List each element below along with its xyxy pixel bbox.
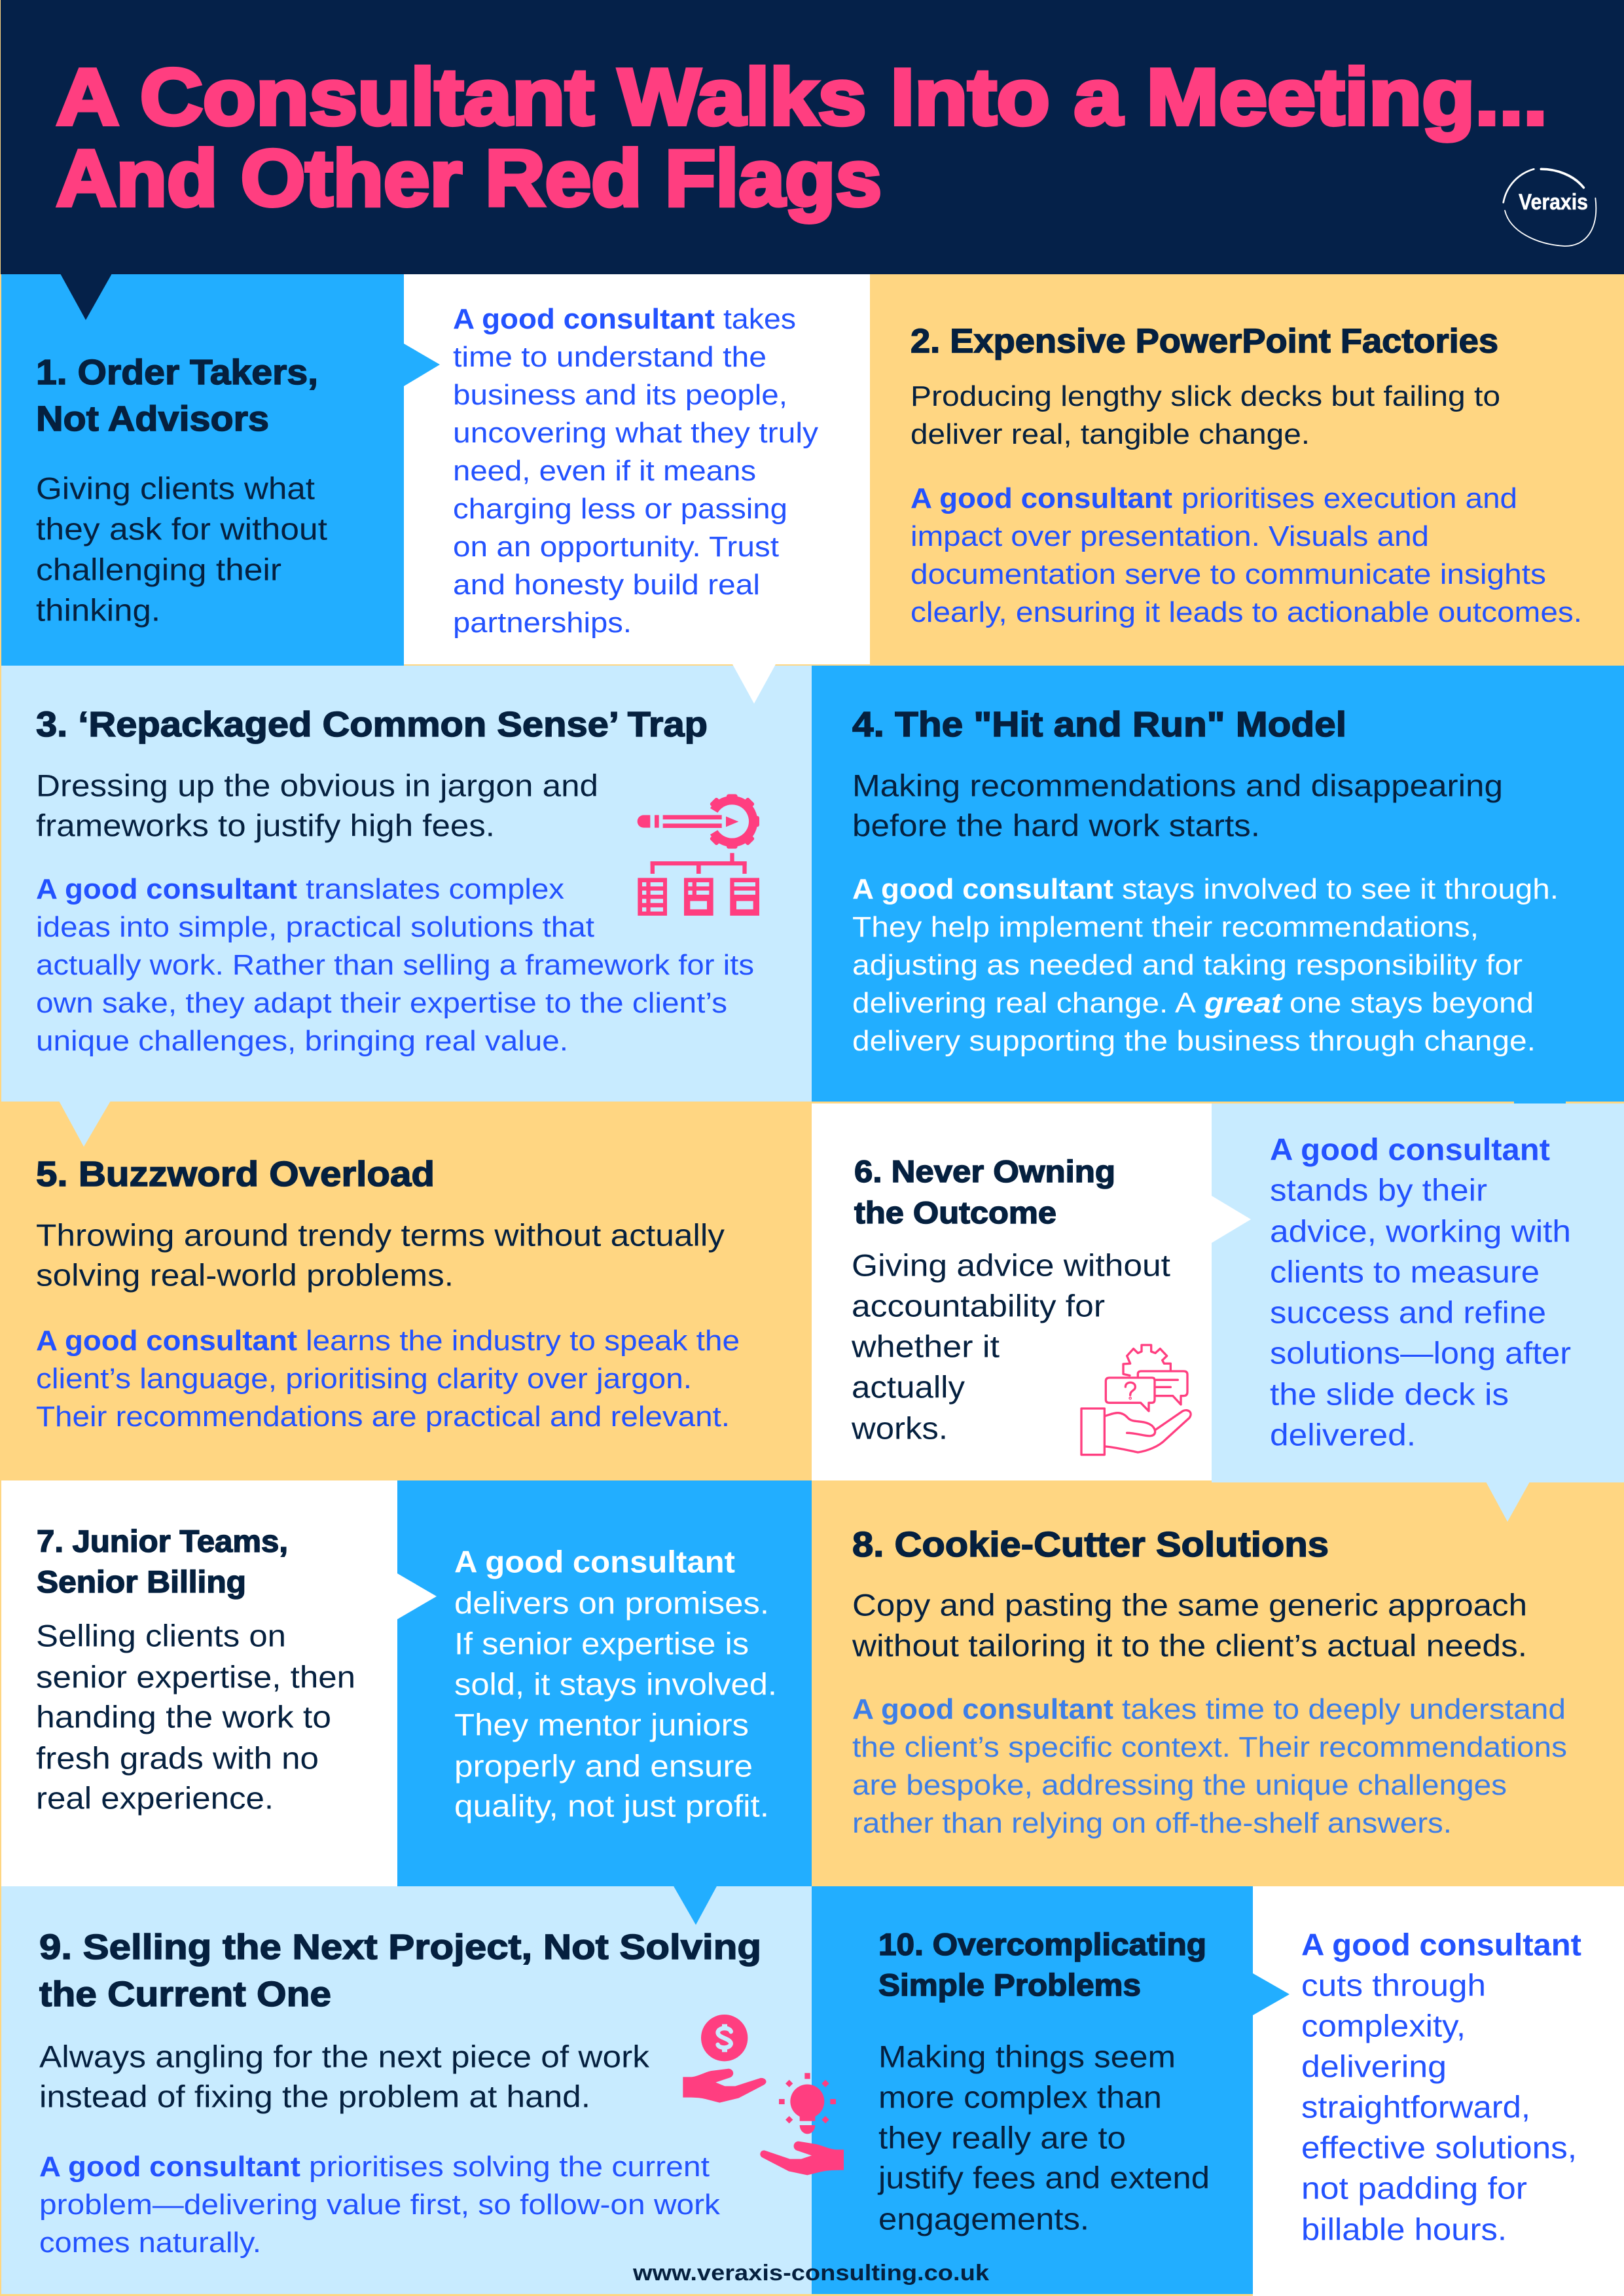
panel: 6 good consultant: success and refine (1270, 1295, 1546, 1330)
panel: 2 expensive powerpoint factories: A good consultant (911, 482, 1172, 514)
panel: 6 good consultant: the slide deck is (1270, 1377, 1509, 1411)
panel: 9 selling the next project: 9. Selling the Next Project, Not Solving (39, 1928, 761, 1967)
panel: 2 expensive powerpoint factories: documentation serve to communicate insights (911, 558, 1546, 590)
title: And Other Red Flags (56, 134, 882, 223)
panel: 7 good consultant: delivers on promises. (454, 1585, 769, 1621)
panel: 8 cookie-cutter solutions: takes time to deeply understand (1122, 1693, 1566, 1725)
logo: Veraxis (1504, 169, 1596, 246)
panel: 10 overcomplicating simple problems: they really are to (878, 2121, 1126, 2155)
panel: 7 junior teams senior billing: Selling clients on (36, 1618, 286, 1653)
panel: 1 good consultant: takes (723, 303, 796, 335)
panel: 3 repackaged common sense trap: translates complex (306, 873, 564, 905)
panel: 6 good consultant: A good consultant (1270, 1132, 1550, 1166)
panel: 3 repackaged common sense trap: own sake, they adapt their expertise to the client’s (36, 987, 727, 1019)
panel: 4 hit and run model: They help implement their recommendations, (852, 911, 1479, 943)
panel: 1 good consultant: and honesty build real (453, 569, 760, 601)
panel: 4 hit and run model: one stays beyond (1290, 987, 1534, 1019)
panel: 4 hit and run model: before the hard work starts. (852, 808, 1260, 843)
panel: 10 overcomplicating simple problems: Making things seem (878, 2039, 1176, 2073)
title: A Consultant Walks Into a Meeting... (56, 52, 1547, 141)
panel: 3 repackaged common sense trap: frameworks to justify high fees. (36, 808, 495, 843)
panel: 4 hit and run model: A good consultant (852, 873, 1113, 905)
logo: Veraxis: Veraxis (1519, 190, 1588, 215)
panel: 6 never owning the outcome: the Outcome (854, 1195, 1056, 1230)
panel: 7 junior teams senior billing: senior expertise, then (36, 1660, 355, 1694)
panel: 4 hit and run model: delivering real change. A (852, 987, 1197, 1019)
panel: 5 buzzword overload: learns the industry to speak the (306, 1325, 740, 1357)
icon: pencil, gear and framework documents (638, 794, 759, 916)
panel: 6 never owning the outcome: 6. Never Owning (854, 1154, 1115, 1189)
panel: 5 buzzword overload: client’s language, prioritising clarity over jargon. (36, 1363, 692, 1395)
title (56, 52, 1547, 223)
panel: 5 buzzword overload: solving real-world problems. (36, 1258, 454, 1292)
panel: 1 order takers not advisors: 1. Order Takers, (36, 353, 318, 392)
panel: 7 good consultant: A good consultant (454, 1545, 735, 1579)
panel: 6 good consultant (1212, 1103, 1624, 1522)
panel: 6 good consultant: advice, working with (1270, 1213, 1571, 1249)
panel: 9 selling the next project: instead of fixing the problem at hand. (39, 2079, 590, 2114)
panel: 4 hit and run model: 4. The "Hit and Run" Model (852, 705, 1346, 744)
panel: 1 good consultant: time to understand the (453, 341, 767, 373)
panel: 3 repackaged common sense trap: Dressing up the obvious in jargon and (36, 768, 598, 802)
panel: 1 good consultant: uncovering what they truly (453, 417, 818, 449)
panel: 10 good consultant: straightforward, (1301, 2089, 1530, 2125)
panel: 2 expensive powerpoint factories: prioritises execution and (1182, 482, 1517, 514)
panel: 8 cookie-cutter solutions: 8. Cookie-Cutter Solutions (852, 1525, 1329, 1564)
panel: 1 good consultant (404, 274, 870, 704)
panel: 7 good consultant: properly and ensure (454, 1749, 753, 1783)
footer url: www.veraxis-consulting.co.uk (632, 2261, 989, 2286)
panel: 10 good consultant: effective solutions, (1301, 2130, 1577, 2165)
panel: 1 good consultant: A good consultant (453, 303, 715, 335)
panel: 6 never owning the outcome: works. (851, 1411, 948, 1445)
panel: 1 order takers not advisors: Not Advisors (36, 399, 269, 439)
panel: 3 repackaged common sense trap: 3. ‘Repackaged Common Sense’ Trap (36, 705, 708, 744)
panel: 7 good consultant: sold, it stays involved. (454, 1666, 777, 1702)
panel: 8 cookie-cutter solutions: without tailoring it to the client’s actual needs. (852, 1628, 1527, 1662)
panel: 1 order takers not advisors: challenging their (36, 552, 281, 586)
panel: 6 never owning the outcome: actually (852, 1369, 965, 1405)
panel: 10 good consultant (1253, 1886, 1624, 2296)
panel: 4 hit and run model (812, 666, 1624, 1103)
panel: 8 cookie-cutter solutions: the client’s specific context. Their recommendations (852, 1731, 1567, 1763)
panel: 1 good consultant: on an opportunity. Trust (453, 531, 779, 563)
panel: 2 expensive powerpoint factories (870, 274, 1624, 666)
panel: 1 good consultant: need, even if it means (453, 455, 756, 487)
panel: 10 good consultant: delivering (1301, 2049, 1447, 2084)
panel: 7 good consultant: quality, not just profit. (454, 1788, 769, 1823)
panel: 10 good consultant: complexity, (1301, 2008, 1466, 2043)
panel: 10 good consultant: billable hours. (1301, 2212, 1507, 2246)
panel: 1 good consultant: partnerships. (453, 607, 632, 639)
panel: 9 selling the next project: Always angling for the next piece of work (39, 2039, 650, 2073)
panel: 7 junior teams senior billing: 7. Junior Teams, (37, 1524, 288, 1558)
panel: 7 good consultant (397, 1479, 812, 1925)
panel: 9 selling the next project: the Current One (39, 1975, 331, 2014)
panel: 8 cookie-cutter solutions: Copy and pasting the same generic approach (852, 1588, 1527, 1622)
panel: 2 expensive powerpoint factories: 2. Expensive PowerPoint Factories (911, 322, 1498, 360)
panel: 1 order takers not advisors: Giving clients what (36, 471, 315, 505)
panel: 2 expensive powerpoint factories: deliver real, tangible change. (911, 418, 1310, 450)
panel: 1 good consultant: business and its people, (453, 379, 787, 411)
panel: 1 good consultant: charging less or passing (453, 493, 787, 525)
panel: 10 good consultant: A good consultant (1301, 1927, 1581, 1962)
panel: 7 junior teams senior billing (1, 1480, 437, 1886)
panel: 4 hit and run model: stays involved to see it through. (1122, 873, 1559, 905)
panel: 3 repackaged common sense trap: actually work. Rather than selling a framework for its (36, 949, 754, 981)
panel: 8 cookie-cutter solutions: A good consultant (852, 1693, 1113, 1725)
panel: 10 overcomplicating simple problems: engagements. (878, 2202, 1089, 2236)
icon: open hand with speech bubbles and gear (1081, 1345, 1191, 1455)
panel: 3 repackaged common sense trap: unique challenges, bringing real value. (36, 1025, 568, 1057)
panel: 6 never owning the outcome: whether it (851, 1329, 1000, 1364)
panel: 8 cookie-cutter solutions: are bespoke, addressing the unique challenges (852, 1769, 1507, 1801)
header band (1, 0, 1624, 320)
panel: 7 good consultant: They mentor juniors (454, 1707, 749, 1742)
panel: 7 junior teams senior billing: Senior Billing (37, 1564, 246, 1599)
panel: 1 order takers not advisors: thinking. (36, 593, 160, 627)
panel: 6 good consultant: stands by their (1270, 1173, 1487, 1207)
panel: 4 hit and run model: delivery supporting the business through change. (852, 1025, 1536, 1057)
panel: 9 selling the next project: prioritises solving the current (309, 2151, 710, 2183)
panel: 9 selling the next project: comes naturally. (39, 2227, 261, 2259)
panel: 4 hit and run model: Making recommendations and disappearing (852, 768, 1503, 802)
panel: 3 repackaged common sense trap: A good consultant (36, 873, 297, 905)
panel: 2 expensive powerpoint factories: impact over presentation. Visuals and (911, 520, 1429, 552)
panel: 6 good consultant: solutions—long after (1270, 1335, 1571, 1371)
panel: 2 expensive powerpoint factories: clearly, ensuring it leads to actionable outcomes. (911, 596, 1582, 628)
panel: 5 buzzword overload: Their recommendations are practical and relevant. (36, 1401, 730, 1433)
panel: 5 buzzword overload: A good consultant (36, 1325, 297, 1357)
panel: 6 never owning the outcome: accountability for (852, 1288, 1105, 1323)
panel: 6 good consultant: clients to measure (1270, 1254, 1540, 1289)
panel: 7 junior teams senior billing: handing the work to (36, 1699, 331, 1734)
panel: 10 overcomplicating simple problems: more complex than (878, 2080, 1162, 2114)
panel: 4 hit and run model: adjusting as needed and taking responsibility for (852, 949, 1523, 981)
panel: 7 junior teams senior billing: fresh grads with no (36, 1741, 319, 1775)
panel: 8 cookie-cutter solutions: rather than relying on off-the-shelf answers. (852, 1807, 1452, 1839)
panel: 1 order takers not advisors: they ask for without (36, 512, 327, 546)
panel: 1 order takers not advisors (1, 274, 440, 666)
panel: 8 cookie-cutter solutions (812, 1480, 1624, 1886)
panel: 10 overcomplicating simple problems (812, 1886, 1290, 2294)
panel: 4 hit and run model: great (1204, 987, 1284, 1019)
panel: 9 selling the next project: A good consultant (39, 2151, 300, 2183)
panel: 5 buzzword overload (0, 1102, 812, 1480)
panel: 6 never owning the outcome (812, 1103, 1251, 1480)
panel: 10 overcomplicating simple problems: Simple Problems (878, 1967, 1141, 2002)
panel: 5 buzzword overload: 5. Buzzword Overload (36, 1155, 435, 1194)
panel: 7 junior teams senior billing: real experience. (36, 1780, 274, 1816)
panel: 3 repackaged common sense trap: ideas into simple, practical solutions that (36, 911, 594, 943)
panel: 6 good consultant: delivered. (1270, 1418, 1416, 1452)
panel: 7 good consultant: If senior expertise is (454, 1626, 749, 1661)
panel: 10 good consultant: cuts through (1301, 1967, 1486, 2003)
panel: 5 buzzword overload: Throwing around trendy terms without actually (36, 1217, 725, 1253)
panel: 3 repackaged common sense trap (1, 666, 812, 1147)
panel: 10 overcomplicating simple problems: 10. Overcomplicating (878, 1927, 1206, 1962)
panel: 9 selling the next project: problem—delivering value first, so follow-on work (39, 2189, 721, 2221)
icon: hands with coin and light bulb (683, 2015, 844, 2175)
panel: 10 overcomplicating simple problems: justify fees and extend (877, 2160, 1210, 2195)
panel: 10 good consultant: not padding for (1301, 2170, 1527, 2206)
panel: 9 selling the next project (1, 1886, 844, 2294)
panel: 6 never owning the outcome: Giving advice without (852, 1247, 1170, 1283)
panel: 2 expensive powerpoint factories: Producing lengthy slick decks but failing to (911, 380, 1500, 412)
